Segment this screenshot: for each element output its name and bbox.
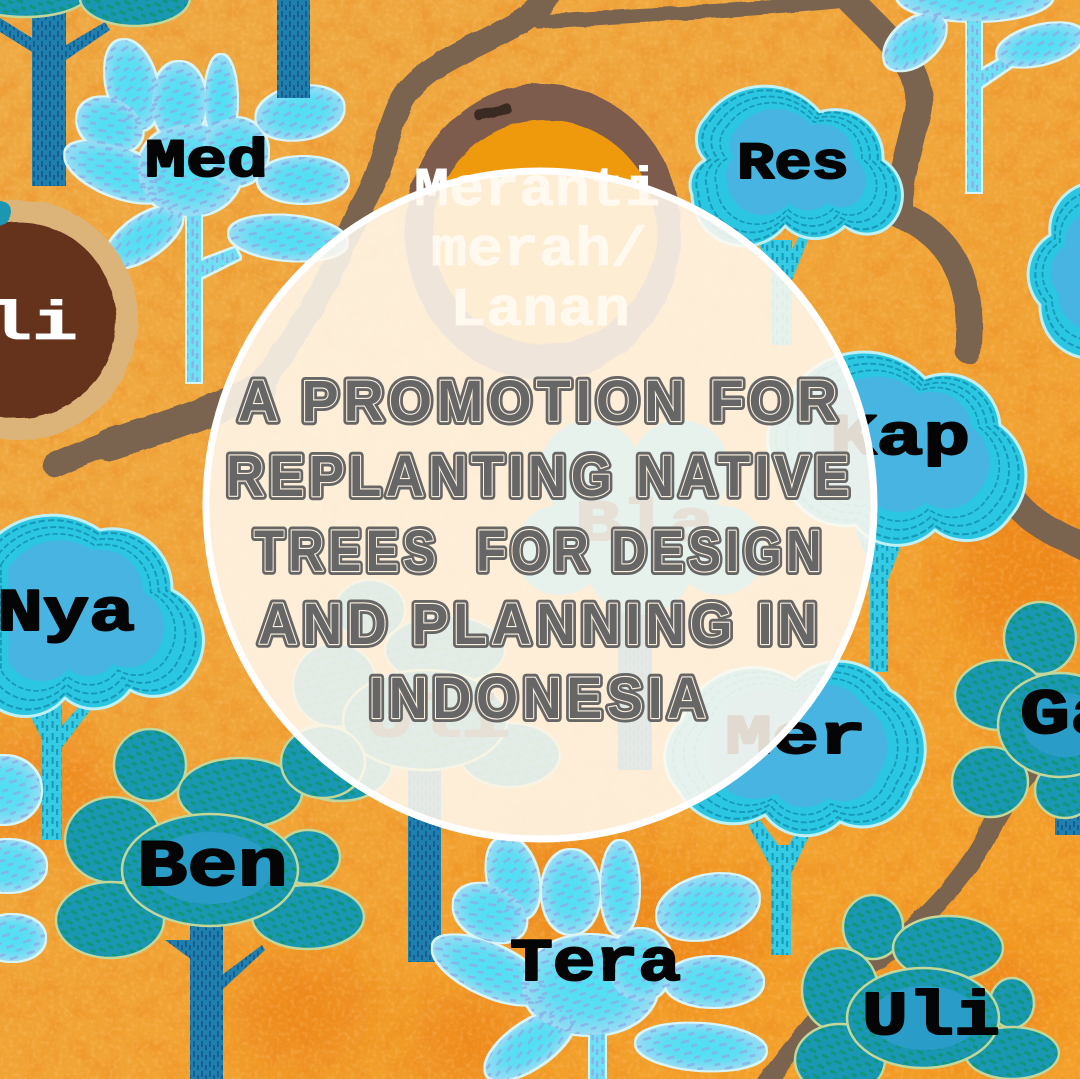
tree: Kap blue crown [768, 352, 1026, 672]
tree: right-edge crown [1028, 182, 1080, 359]
title: TREES FOR DESIGN [254, 519, 826, 584]
tree: Nya blue crown [0, 515, 203, 840]
tree: Uli teal crown [795, 895, 1059, 1079]
title: REPLANTING NATIVE [226, 444, 854, 509]
label: Res: Res [737, 135, 849, 194]
title: AND PLANNING IN [258, 592, 822, 657]
pot: Meranti merah [405, 84, 681, 380]
label: Meranti merah / Lanan: merah/ [431, 219, 647, 282]
label: Meranti merah / Lanan: Meranti [414, 159, 660, 222]
title: TREES FOR DESIGN [254, 519, 826, 584]
tree: top-left dark tree [0, 0, 190, 186]
tree: Uli centre tree [288, 580, 560, 962]
tree: top trunk [277, 0, 310, 98]
central translucent circle [206, 171, 874, 839]
tree: left-edge light petals [0, 756, 46, 961]
title: TREES FOR DESIGN [254, 519, 826, 584]
label: Bla: Bla [575, 493, 715, 558]
tree: Med light cyan petals [57, 34, 349, 382]
label: Tera: Tera [510, 931, 681, 999]
tree: Ben teal crown [56, 726, 365, 1079]
label: Kap: Kap [830, 407, 970, 472]
title: A PROMOTION FOR [238, 369, 842, 434]
label: Nya: Nya [0, 581, 135, 649]
title: AND PLANNING IN [258, 592, 822, 657]
title: INDONESIA [369, 666, 711, 731]
title: INDONESIA [369, 666, 711, 731]
tree: Bla centre tree [515, 420, 765, 770]
tree: Mer blue crown [665, 661, 925, 955]
label: Mer: Mer [725, 706, 866, 770]
tree: G teal crown [952, 602, 1080, 835]
title: INDONESIA [369, 666, 711, 731]
tree: Tera light petals [423, 831, 767, 1079]
title: A PROMOTION FOR [238, 369, 842, 434]
label: Uli in circle: Uli [365, 689, 510, 754]
title: REPLANTING NATIVE [226, 444, 854, 509]
tree: top-right light petals [874, 0, 1080, 192]
label: Med: Med [145, 132, 268, 193]
pot: Uli brown soil [0, 200, 138, 440]
title [226, 369, 854, 731]
title: A PROMOTION FOR [238, 369, 842, 434]
title: REPLANTING NATIVE [226, 444, 854, 509]
title: AND PLANNING IN [258, 592, 822, 657]
tree: Res blue crown [690, 86, 902, 345]
label: Uli lower right: Uli [862, 982, 1000, 1053]
label: Meranti merah / Lanan: Lanan [450, 279, 630, 342]
label: Meranti merah / Lanan [414, 159, 660, 342]
label: Ben: Ben [137, 830, 288, 905]
